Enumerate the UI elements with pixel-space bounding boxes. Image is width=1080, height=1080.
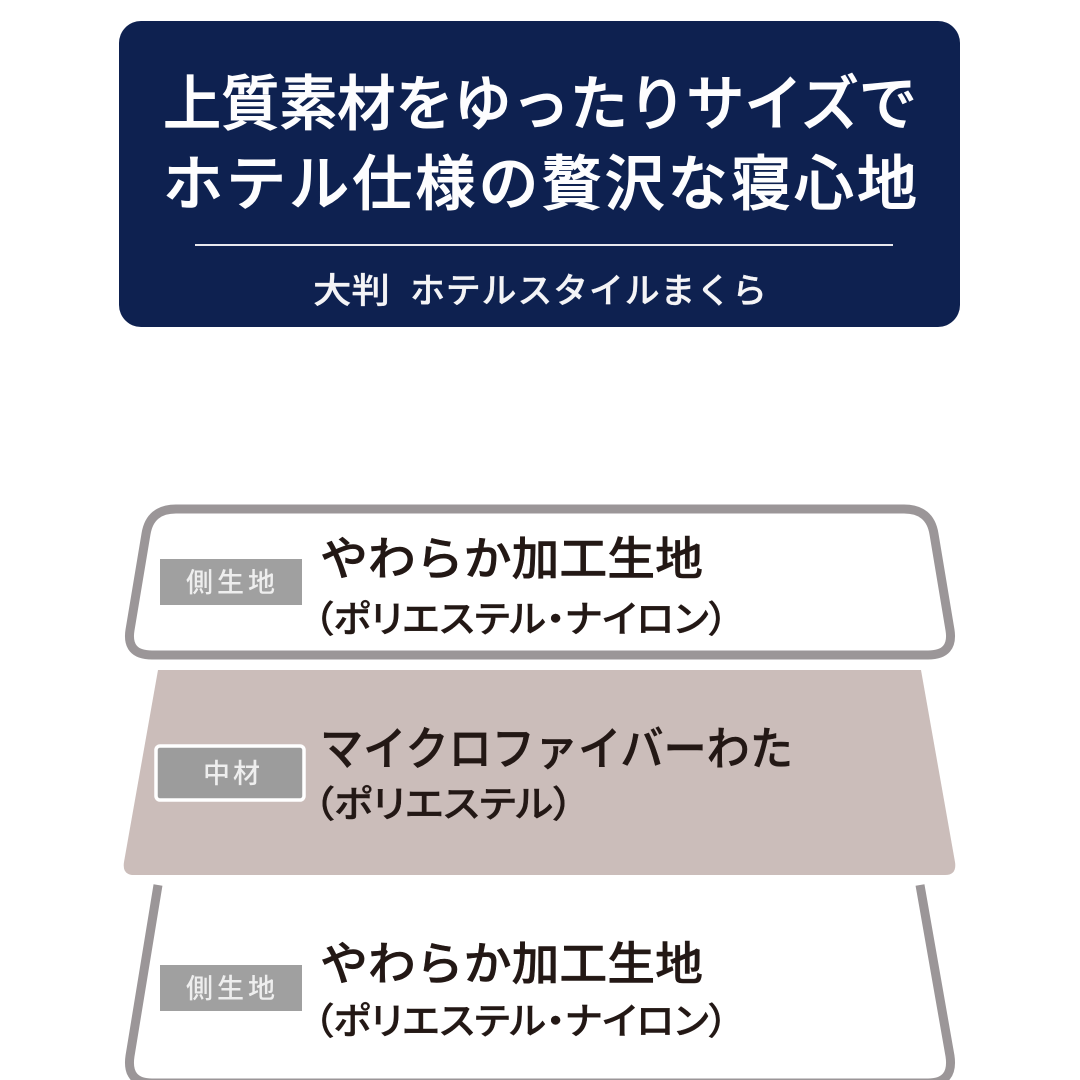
product name: ホテルスタイルまくら xyxy=(410,272,767,311)
heading line 1: 上質素材をゆったりサイズで xyxy=(163,71,917,138)
material composition: （ポリエステル・ナイロン） xyxy=(314,1001,728,1042)
heading line 2: ホテル仕様の贅沢な寝心地 xyxy=(163,151,917,218)
badge: filling xyxy=(156,746,304,800)
panel: bottom layer outer fabric xyxy=(129,885,951,1080)
badge: outer fabric xyxy=(160,559,302,605)
badge: filling: 中材 xyxy=(203,759,260,789)
panel: title header xyxy=(119,21,960,327)
material name: やわらか加工生地 xyxy=(320,938,703,990)
badge: outer fabric: 側生地 xyxy=(186,974,275,1004)
panel: middle layer filling xyxy=(124,670,955,875)
badge: outer fabric xyxy=(160,965,302,1011)
badge: outer fabric: 側生地 xyxy=(186,568,275,598)
material name: やわらか加工生地 xyxy=(320,533,703,585)
panel: top layer outer fabric xyxy=(129,509,951,655)
material composition: （ポリエステル・ナイロン） xyxy=(314,599,728,640)
material name: マイクロファイバーわた xyxy=(320,723,793,775)
material composition: （ポリエステル） xyxy=(314,784,573,825)
product name: 大判 xyxy=(313,272,390,311)
